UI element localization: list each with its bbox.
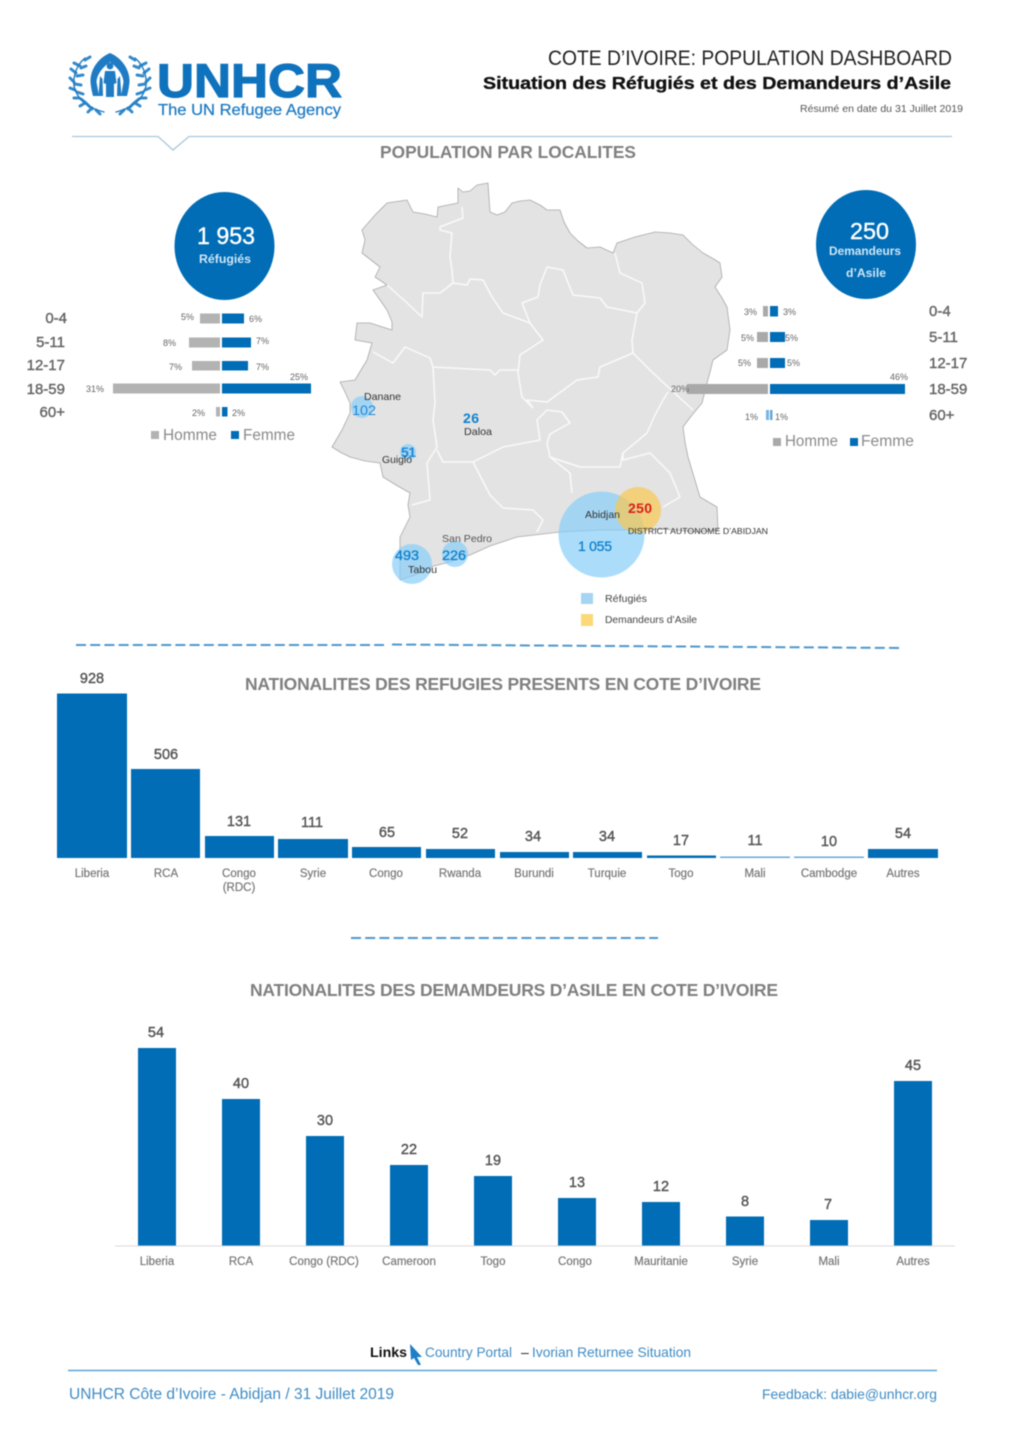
values: 54 (895, 826, 911, 842)
legend (151, 427, 295, 444)
category labels: (RDC) (223, 882, 255, 894)
percent labels: 46% (890, 372, 908, 382)
female bars (770, 306, 905, 420)
panel: asylum seekers total: 250 (850, 218, 889, 244)
percent labels: 25% (290, 372, 308, 382)
panel: refugees total: Réfugiés (199, 252, 251, 266)
map labels (352, 391, 768, 576)
category labels: RCA (229, 1256, 253, 1268)
values: 34 (525, 829, 541, 845)
category labels: Togo (481, 1256, 505, 1268)
heading: refugee nationalities: NATIONALITES DES REFUGIES PRESENTS EN COTE D’IVOIRE (245, 674, 761, 694)
category labels: Burundi (514, 868, 554, 880)
footer: feedback: Feedback: dabie@unhcr.org (762, 1386, 937, 1402)
chart: asylum seekers age pyramid (671, 303, 967, 450)
age labels: 0-4 (929, 303, 951, 320)
percent labels: 7% (256, 336, 269, 346)
label: Tabou: Tabou (408, 564, 437, 576)
percent labels: 20% (671, 384, 689, 394)
category labels: RCA (154, 868, 178, 880)
value: Abidjan refugees: 1 055 (578, 538, 612, 554)
links label: Links (370, 1344, 407, 1360)
map of Cote d'Ivoire (332, 183, 730, 580)
header rule with notch (72, 136, 952, 150)
values: 928 (80, 671, 104, 687)
category labels: Cambodge (801, 868, 857, 880)
legend (773, 433, 914, 450)
female bars (222, 314, 311, 416)
category labels: Congo (RDC) (289, 1256, 359, 1268)
values: 506 (154, 747, 178, 763)
axis line (115, 1245, 955, 1247)
percent labels: 3% (783, 307, 796, 317)
age labels: 60+ (40, 404, 65, 421)
percent labels (671, 307, 908, 422)
bubble: Tabou (392, 544, 432, 584)
label: Danane: Danane (364, 391, 401, 403)
legend: Homme (785, 433, 838, 450)
heading: asylum seeker nationalities: NATIONALITES DES DEMAMDEURS D’ASILE EN COTE D’IVOIRE (250, 980, 778, 1000)
bubble: Danane (351, 396, 373, 418)
logo tagline: The UN Refugee Agency (158, 102, 341, 119)
values: 8 (741, 1194, 749, 1210)
map legend (581, 593, 697, 626)
values: 7 (824, 1197, 832, 1213)
label: Abidjan: Abidjan (585, 509, 620, 521)
footer: office and date: UNHCR Côte d’Ivoire - Abidjan / 31 Juillet 2019 (69, 1386, 394, 1403)
chart: asylum seeker nationalities (115, 1025, 955, 1268)
percent labels: 5% (741, 333, 754, 343)
age labels: 5-11 (929, 329, 958, 346)
chart: refugee nationalities (57, 671, 938, 894)
age labels (27, 310, 67, 421)
value: Abidjan asylum seekers: 250 (628, 500, 652, 516)
percent labels: 6% (249, 314, 262, 324)
bubble: Abidjan asylum seekers (615, 487, 661, 533)
category labels: Congo (369, 868, 403, 880)
percent labels: 2% (232, 408, 245, 418)
map outline (332, 183, 730, 580)
links row (370, 1344, 691, 1365)
age labels: 60+ (929, 407, 955, 424)
percent labels: 5% (738, 358, 751, 368)
age labels: 5-11 (36, 334, 65, 351)
bubble: Guiglo (400, 444, 416, 460)
link: returnee situation: Ivorian Returnee Situation (532, 1344, 691, 1360)
percent labels: 31% (86, 384, 104, 394)
label: Abidjan district: DISTRICT AUTONOME D’ABIDJAN (628, 526, 768, 536)
values: 45 (905, 1058, 921, 1074)
value: San Pedro: 226 (442, 547, 466, 563)
age labels: 18-59 (929, 381, 967, 398)
panel: refugees total (174, 192, 274, 300)
label: Daloa: Daloa (464, 426, 492, 438)
category labels: Mali (744, 868, 766, 880)
values: 131 (227, 814, 251, 830)
map region borders (373, 207, 693, 532)
values: 54 (148, 1025, 164, 1041)
icon: UNHCR emblem (70, 53, 150, 114)
age labels: 0-4 (45, 310, 67, 327)
male bars (113, 314, 220, 416)
category labels: Autres (896, 1256, 930, 1268)
values: 19 (485, 1153, 501, 1169)
panel: asylum seekers total: Demandeurs (829, 244, 901, 258)
value: Tabou: 493 (395, 547, 419, 563)
category labels: Congo (222, 868, 256, 880)
age labels: 18-59 (27, 381, 65, 398)
values: 40 (233, 1076, 249, 1092)
values: 13 (569, 1175, 585, 1191)
category labels (140, 1256, 930, 1268)
category labels: Liberia (140, 1256, 175, 1268)
percent labels: 2% (192, 408, 205, 418)
legend: Homme (163, 427, 217, 444)
category labels: Cameroon (382, 1256, 436, 1268)
values: 30 (317, 1113, 333, 1129)
legend: Femme (243, 427, 295, 444)
value: Danane: 102 (352, 402, 376, 418)
category labels: Liberia (75, 868, 110, 880)
logo wordmark: UNHCR (157, 54, 342, 107)
percent labels: 5% (785, 333, 798, 343)
value: Guiglo: 51 (401, 444, 416, 460)
panel: refugees total: 1 953 (197, 223, 255, 250)
category labels: Rwanda (439, 868, 482, 880)
category labels: Autres (886, 868, 920, 880)
category labels: Togo (669, 868, 693, 880)
percent labels: 8% (163, 338, 176, 348)
category labels: Syrie (732, 1256, 758, 1268)
percent labels: 5% (181, 312, 194, 322)
map bubbles (351, 396, 661, 584)
values: 10 (821, 834, 837, 850)
bubble: San Pedro (442, 541, 468, 567)
category labels: Turquie (588, 868, 626, 880)
age labels: 12-17 (27, 357, 65, 374)
link: country portal: Country Portal (425, 1344, 512, 1360)
percent labels: 5% (787, 358, 800, 368)
values (80, 671, 911, 850)
label: San Pedro: San Pedro (442, 533, 492, 545)
bubble: Abidjan refugees (558, 492, 644, 578)
category labels: Congo (558, 1256, 592, 1268)
legend: Femme (861, 433, 914, 450)
legend: refugees: Réfugiés (605, 593, 647, 605)
bars (57, 694, 938, 858)
values: 34 (599, 829, 615, 845)
category labels: Syrie (300, 868, 326, 880)
age labels: 12-17 (929, 355, 967, 372)
percent labels: 7% (256, 362, 269, 372)
date note: Résumé en date du 31 Juillet 2019 (800, 103, 963, 115)
heading: population par localites: POPULATION PAR LOCALITES (380, 142, 636, 162)
label: Guiglo: Guiglo (382, 454, 412, 466)
category labels (75, 868, 920, 894)
UNHCR logo (70, 53, 342, 119)
percent labels: 1% (745, 412, 758, 422)
male bars (687, 306, 769, 420)
values: 17 (673, 833, 689, 849)
panel: asylum seekers total: d’Asile (846, 266, 886, 280)
title: COTE D’IVOIRE: POPULATION DASHBOARD (548, 47, 952, 70)
values: 52 (452, 826, 468, 842)
values (148, 1025, 921, 1213)
value: Daloa: 26 (463, 410, 479, 426)
icon: cursor arrow (410, 1344, 422, 1365)
values: 65 (379, 825, 395, 841)
age labels (929, 303, 967, 424)
category labels: Mali (818, 1256, 840, 1268)
percent labels: 7% (169, 362, 182, 372)
link separator: – (521, 1344, 529, 1360)
subtitle: Situation des Réfugiés et des Demandeurs d’Asile (483, 73, 951, 93)
values: 11 (747, 833, 763, 849)
bars (138, 1048, 932, 1246)
percent labels: 3% (744, 307, 757, 317)
legend: asylum seekers: Demandeurs d’Asile (605, 614, 697, 626)
panel: asylum seekers total (816, 190, 916, 299)
category labels: Mauritanie (634, 1256, 688, 1268)
values: 12 (653, 1179, 669, 1195)
percent labels (86, 312, 308, 418)
values: 22 (401, 1142, 417, 1158)
percent labels: 1% (775, 412, 788, 422)
chart: refugees age pyramid (27, 310, 311, 444)
values: 111 (301, 815, 323, 831)
